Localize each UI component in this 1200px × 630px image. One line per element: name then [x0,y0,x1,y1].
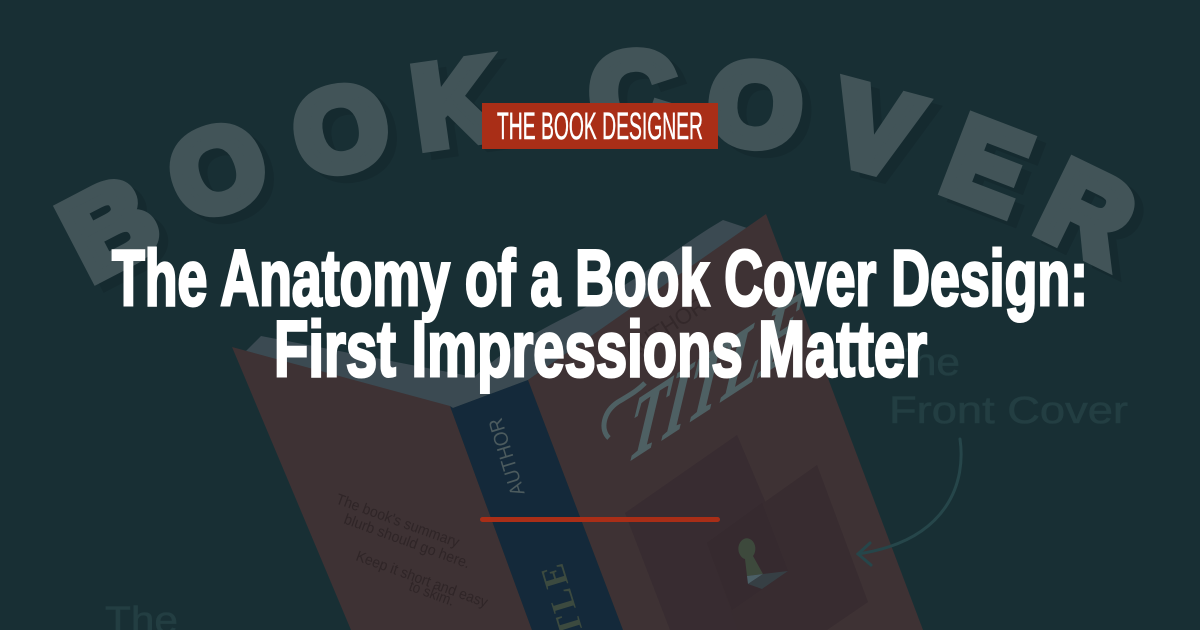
spine [450,380,623,630]
curved heading: BOOK COVER: O [153,94,283,246]
curved heading: BOOK COVER: O [283,57,399,202]
back cover blurb [334,491,490,611]
brand badge: THE BOOK DESIGNER [497,106,703,148]
curved heading: BOOK COVER: K [406,34,504,173]
front cover title: TITLE [618,264,815,487]
back cover [232,347,532,630]
book pages [246,220,747,408]
illustration: book [232,214,923,630]
back cover blurb: blurb should go here. [342,511,472,572]
back cover blurb: Keep it short and easy [354,548,490,611]
curved heading: BOOK COVER: V [819,58,931,203]
arrow to front cover [858,439,961,565]
label: The Front Cover: Front Cover [889,390,1128,432]
door panels [625,435,868,630]
curved heading: BOOK COVER: O [704,37,807,173]
back cover blurb: The book's summary [334,491,462,551]
label: The Front Cover: The [887,342,960,384]
spine author text: AUTHOR [485,415,529,498]
brand badge [482,103,718,149]
curved heading: BOOK COVER [42,28,1152,304]
main title [112,233,1088,393]
curved heading: BOOK COVER: B [42,151,177,304]
main title: First Impressions Matter [274,304,927,393]
accent divider [480,517,720,522]
front cover author: AUTHOR [619,292,711,364]
label: The Front Cover [887,342,1128,432]
curved heading: BOOK COVER: R [1022,138,1152,289]
curved heading: BOOK COVER: E [929,92,1045,239]
front cover [528,214,923,630]
curved heading: BOOK COVER: C [587,28,679,160]
back cover blurb: to skim. [407,578,457,610]
keyhole [738,538,788,589]
